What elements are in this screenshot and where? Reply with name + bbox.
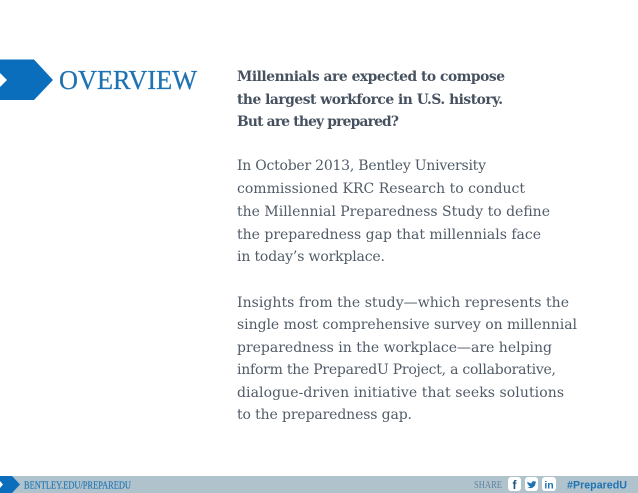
footer bar [0,476,638,493]
icon: facebook: f [512,478,518,492]
text block: insights: preparedness in the workplace—are helping [237,340,552,356]
share label: SHARE [474,480,502,491]
icon: linkedin [542,477,556,492]
icon: twitter [525,477,538,491]
text block: insights: inform the PreparedU Project, a collaborative, [237,362,556,378]
text block: insights: to the preparedness gap. [237,407,412,423]
hashtag: #PreparedU [567,480,627,492]
text block: study description: in today’s workplace. [237,249,385,265]
text block: insights [237,295,578,423]
icon: facebook [508,477,521,492]
text block: insights: dialogue-driven initiative that seeks solutions [237,385,564,401]
icon: blue heading arrow [0,60,53,100]
text block: intro heading [237,69,505,130]
text block: insights: single most comprehensive survey on millennial [237,317,578,333]
text block: study description: commissioned KRC Research to conduct [237,181,525,197]
text block: study description: In October 2013, Bentley University [237,158,486,174]
text block: intro heading: the largest workforce in U.S. history. [237,92,503,108]
icon: footer arrow [0,476,20,493]
text block: study description: the preparedness gap that millennials face [237,227,541,243]
text block: intro heading: But are they prepared? [237,114,399,130]
footer link: BENTLEY.EDU/PREPAREDU [24,480,131,492]
text block: insights: Insights from the study—which represents the [237,295,569,311]
text block: study description [237,158,550,265]
icon: linkedin: in [544,480,554,492]
text block: intro heading: Millennials are expected to compose [237,69,505,85]
title: OVERVIEW [59,65,197,95]
text block: study description: the Millennial Preparedness Study to define [237,204,550,220]
